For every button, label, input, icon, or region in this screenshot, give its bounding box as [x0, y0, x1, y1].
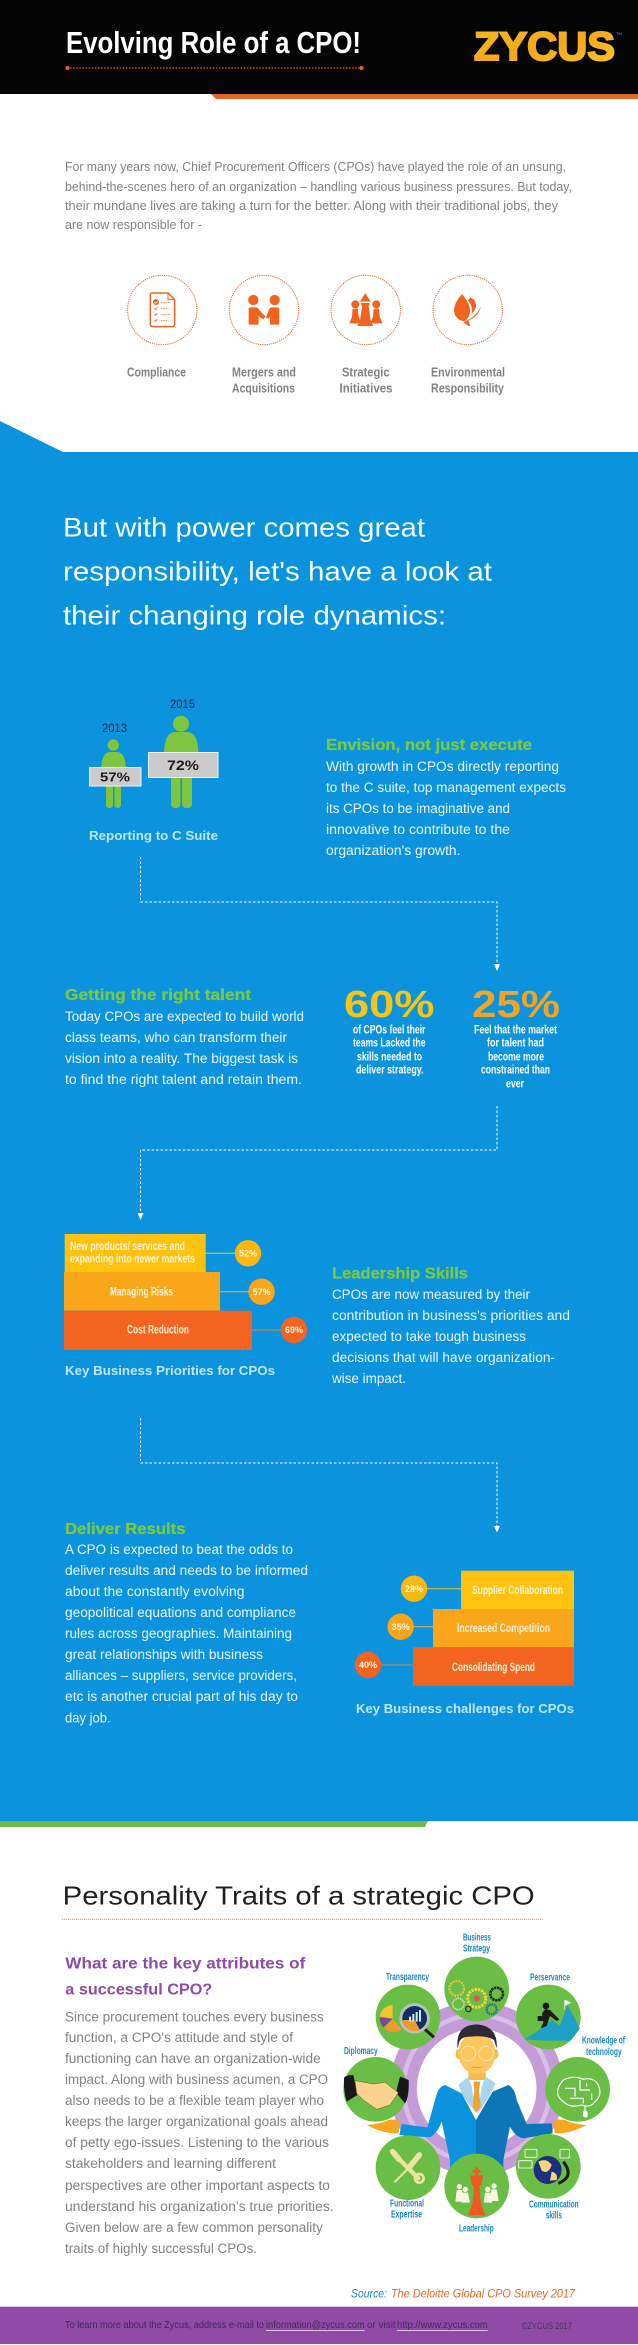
panel: blue role dynamics	[0, 421, 638, 1827]
text block: envision: With growth in CPOs directly reporting	[326, 759, 559, 774]
text block: personality paragraph: impact. Along with business acumen, a CPO	[65, 2072, 328, 2087]
text block: envision: organization's growth.	[326, 843, 460, 858]
bar: supplier collaboration: Supplier Collaboration	[472, 1585, 563, 1597]
label: functional expertise	[390, 2198, 424, 2221]
figure 2015	[148, 716, 218, 808]
label: transparency: Transparency	[386, 1971, 429, 1983]
bar: managing risks: Managing Risks	[110, 1287, 173, 1299]
label: mergers and acquisitions: Mergers and	[232, 366, 296, 380]
subheading: key attributes	[65, 1956, 306, 1999]
figure 2015: 72%	[167, 757, 200, 773]
label: perseverance: Perservance	[530, 1972, 570, 1984]
icon: mergers handshake	[229, 275, 299, 345]
diagram: CPO traits wheel	[343, 1957, 610, 2218]
bar: new products: expanding into newer markets	[70, 1254, 195, 1266]
label: communication skills	[529, 2199, 579, 2222]
stat: 60 percent: teams Lacked the	[353, 1036, 426, 1050]
bar: increased competition: Increased Competition	[457, 1623, 550, 1635]
footer contact text: information@zycus.com	[266, 2320, 365, 2331]
bar: consolidating spend	[355, 1647, 574, 1686]
footer band	[0, 2307, 638, 2344]
label: compliance: Compliance	[127, 366, 186, 380]
text block: personality paragraph	[65, 2009, 334, 2256]
label: communication skills: Communication	[529, 2199, 579, 2211]
label: strategic initiatives: Initiatives	[340, 382, 393, 396]
label: business strategy: Strategy	[463, 1943, 490, 1955]
chart: reporting to C suite figures	[89, 699, 218, 843]
stat: 60 percent: 60%	[344, 984, 434, 1026]
stat: 25 percent: for talent had	[487, 1036, 544, 1050]
bar: cost reduction: 69%	[285, 1325, 303, 1335]
label: business strategy	[463, 1932, 491, 1955]
trait: transparency	[376, 1985, 440, 2049]
source note: Source:	[351, 2287, 387, 2301]
section heading	[63, 513, 493, 630]
intro paragraph: are now responsible for -	[65, 217, 202, 232]
figure 2013	[90, 739, 141, 808]
label: environmental responsibility: Responsibility	[431, 382, 504, 396]
text block: leadership skills: Leadership Skills	[332, 1266, 468, 1283]
text block: envision: its CPOs to be imaginative and	[326, 801, 510, 816]
text block: personality paragraph: function, a CPO's attitude and style of	[65, 2030, 293, 2045]
footer contact text: http://www.zycus.com	[397, 2320, 488, 2331]
text block: leadership skills: wise impact.	[331, 1371, 406, 1386]
text block: getting the right talent: class teams, who can transform their	[65, 1030, 287, 1045]
stat: 25 percent: become more	[488, 1050, 544, 1064]
stat: 60 percent: deliver strategy.	[356, 1063, 424, 1077]
arrow: connector one	[140, 857, 500, 971]
text block: deliver results: day job.	[65, 1711, 111, 1726]
bar: new products: 52%	[239, 1248, 257, 1258]
text block: personality paragraph: Given below are a few common personality	[65, 2220, 323, 2235]
label: strategic initiatives	[340, 366, 393, 396]
label: communication skills: skills	[546, 2210, 562, 2222]
icon: strategic chess pieces	[331, 275, 400, 345]
copyright: ©ZYCUS 2017	[522, 2321, 572, 2331]
text block: personality paragraph: functioning can have an organization-wide	[65, 2051, 321, 2066]
text block: leadership skills: decisions that will have organization-	[332, 1350, 555, 1365]
trait: business strategy	[444, 1957, 509, 2021]
intro paragraph: their mundane lives are taking a turn for the better. Along with their traditional jobs, they	[65, 198, 558, 213]
arrow: connector two	[138, 1106, 497, 1220]
intro paragraph: behind-the-scenes hero of an organization – handling various business pressures. But today,	[65, 179, 572, 194]
bar: managing risks: 57%	[253, 1287, 271, 1297]
bar: cost reduction	[64, 1311, 307, 1350]
label: functional expertise: Expertise	[391, 2209, 422, 2221]
text block: leadership skills	[331, 1266, 570, 1386]
source note: The Deloitte Global CPO Survey 2017	[391, 2287, 576, 2301]
text block: personality paragraph: traits of highly successful CPOs.	[65, 2241, 257, 2256]
stat: 25 percent: Feel that the market	[474, 1022, 557, 1036]
chart: key business challenges	[355, 1571, 574, 1716]
label: strategic initiatives: Strategic	[342, 366, 390, 380]
text block: getting the right talent: Getting the right talent	[65, 987, 252, 1004]
trait: perseverance	[516, 1985, 581, 2049]
text block: leadership skills: CPOs are now measured by their	[332, 1287, 530, 1302]
intro paragraph: For many years now, Chief Procurement Officers (CPOs) have played the role of an unsung,	[65, 159, 566, 174]
stat: 25 percent: 25%	[472, 984, 560, 1026]
text block: deliver results: deliver results and needs to be informed	[65, 1563, 308, 1578]
responsibility icons row	[127, 275, 505, 396]
intro paragraph	[65, 159, 572, 232]
text block: personality paragraph: also needs to be a flexible team player who	[65, 2093, 324, 2108]
footer contact text: To learn more about the Zycus, address e-mail to	[65, 2320, 264, 2331]
chart caption: Reporting to C Suite	[89, 828, 218, 843]
trait: knowledge of technology	[545, 2057, 610, 2122]
label: environmental responsibility	[431, 366, 505, 396]
bar: supplier collaboration: 28%	[405, 1584, 423, 1594]
bar: new products	[65, 1234, 261, 1272]
text block: envision: to the C suite, top management expects	[326, 780, 566, 795]
text block: envision: Envision, not just execute	[326, 737, 532, 754]
label: diplomacy: Diplomacy	[344, 2045, 378, 2057]
label: mergers and acquisitions	[232, 366, 296, 396]
label: knowledge of technology	[582, 2035, 625, 2058]
purple ring	[403, 2015, 550, 2162]
bar: new products: New products/ services and	[70, 1241, 185, 1253]
title: Evolving Role of a CPO!	[66, 25, 361, 60]
label: business strategy: Business	[463, 1932, 491, 1944]
stat: 25 percent	[472, 984, 560, 1091]
text block: deliver results: etc is another crucial part of his day to	[65, 1689, 298, 1704]
text block: personality paragraph: Since procurement touches every business	[65, 2009, 324, 2024]
text block: getting the right talent	[65, 987, 304, 1087]
section heading: But with power comes great	[63, 513, 426, 543]
chart caption: Key Business Priorities for CPOs	[65, 1363, 275, 1378]
figure: businessman	[367, 2024, 587, 2177]
subheading: key attributes: What are the key attributes of	[65, 1956, 306, 1973]
text block: deliver results: rules across geographies. Maintaining	[65, 1626, 292, 1641]
text block: deliver results	[65, 1521, 308, 1726]
footer contact text	[65, 2320, 488, 2331]
figure 2013: 57%	[100, 770, 130, 784]
text block: getting the right talent: to find the right talent and retain them.	[65, 1072, 302, 1087]
bar: cost reduction: Cost Reduction	[127, 1325, 189, 1337]
bar: supplier collaboration	[401, 1571, 574, 1609]
bar: consolidating spend: 40%	[359, 1660, 377, 1670]
chart: key business priorities	[64, 1234, 307, 1378]
text block: deliver results: Deliver Results	[65, 1521, 186, 1538]
arrow: connector three	[140, 1418, 500, 1532]
label: leadership: Leadership	[459, 2223, 494, 2235]
text block: leadership skills: expected to take tough business	[332, 1329, 526, 1344]
text block: envision	[326, 737, 566, 858]
text block: leadership skills: contribution in business's priorities and	[332, 1308, 570, 1323]
text block: getting the right talent: Today CPOs are expected to build world	[65, 1009, 304, 1024]
text block: personality paragraph: perspectives are other important aspects to	[65, 2178, 330, 2193]
text block: deliver results: A CPO is expected to beat the odds to	[65, 1542, 293, 1557]
trait: communication skills	[516, 2134, 581, 2199]
stat: 60 percent	[344, 984, 434, 1077]
header band	[0, 0, 638, 99]
trait: leadership	[444, 2154, 509, 2218]
section heading: their changing role dynamics:	[63, 600, 446, 630]
stat: 60 percent: skills needed to	[357, 1050, 422, 1064]
trait: functional expertise	[376, 2135, 440, 2200]
icon: compliance	[128, 275, 197, 345]
section heading: responsibility, let's have a look at	[63, 556, 493, 586]
text block: deliver results: alliances – suppliers, service providers,	[65, 1668, 297, 1683]
logo: Zycus: ZYCUS	[474, 25, 615, 69]
label: environmental responsibility: Environmental	[431, 366, 505, 380]
text block: deliver results: about the constantly evolving	[65, 1584, 244, 1599]
text block: deliver results: great relationships with business	[65, 1647, 263, 1662]
footer contact text: or visit	[367, 2320, 396, 2331]
label: mergers and acquisitions: Acquisitions	[232, 382, 295, 396]
icon: environmental leaf	[433, 275, 502, 345]
title dotted underline	[66, 66, 364, 70]
bar: managing risks	[64, 1272, 275, 1311]
text block: envision: innovative to contribute to the	[326, 822, 510, 837]
text block: personality paragraph: understand his organization's true priorities.	[65, 2199, 334, 2214]
text block: personality paragraph: stakeholders and learning different	[65, 2156, 276, 2171]
bar: consolidating spend: Consolidating Spend	[452, 1662, 535, 1674]
heading: personality traits: Personality Traits of a strategic CPO	[63, 1880, 535, 1910]
stat: 60 percent: of CPOs feel their	[353, 1022, 426, 1036]
text block: personality paragraph: of petty ego-issues. Listening to the various	[65, 2135, 329, 2150]
bar: increased competition: 35%	[392, 1622, 410, 1632]
chart caption: Key Business challenges for CPOs	[356, 1701, 574, 1716]
year label 2013: 2013	[102, 723, 127, 735]
subheading: key attributes: a successful CPO?	[65, 1982, 212, 1999]
stat: 25 percent: ever	[506, 1077, 524, 1091]
logo: Zycus: TM	[616, 31, 622, 36]
trait: diplomacy handshake	[343, 2057, 409, 2122]
year label 2015: 2015	[170, 699, 195, 711]
text block: personality paragraph: keeps the larger organizational goals ahead	[65, 2114, 328, 2129]
text block: getting the right talent: vision into a reality. The biggest task is	[65, 1051, 298, 1066]
stat: 25 percent: constrained than	[481, 1063, 550, 1077]
bar: increased competition	[388, 1609, 574, 1647]
text block: deliver results: geopolitical equations and compliance	[65, 1605, 296, 1620]
label: functional expertise: Functional	[390, 2198, 424, 2210]
